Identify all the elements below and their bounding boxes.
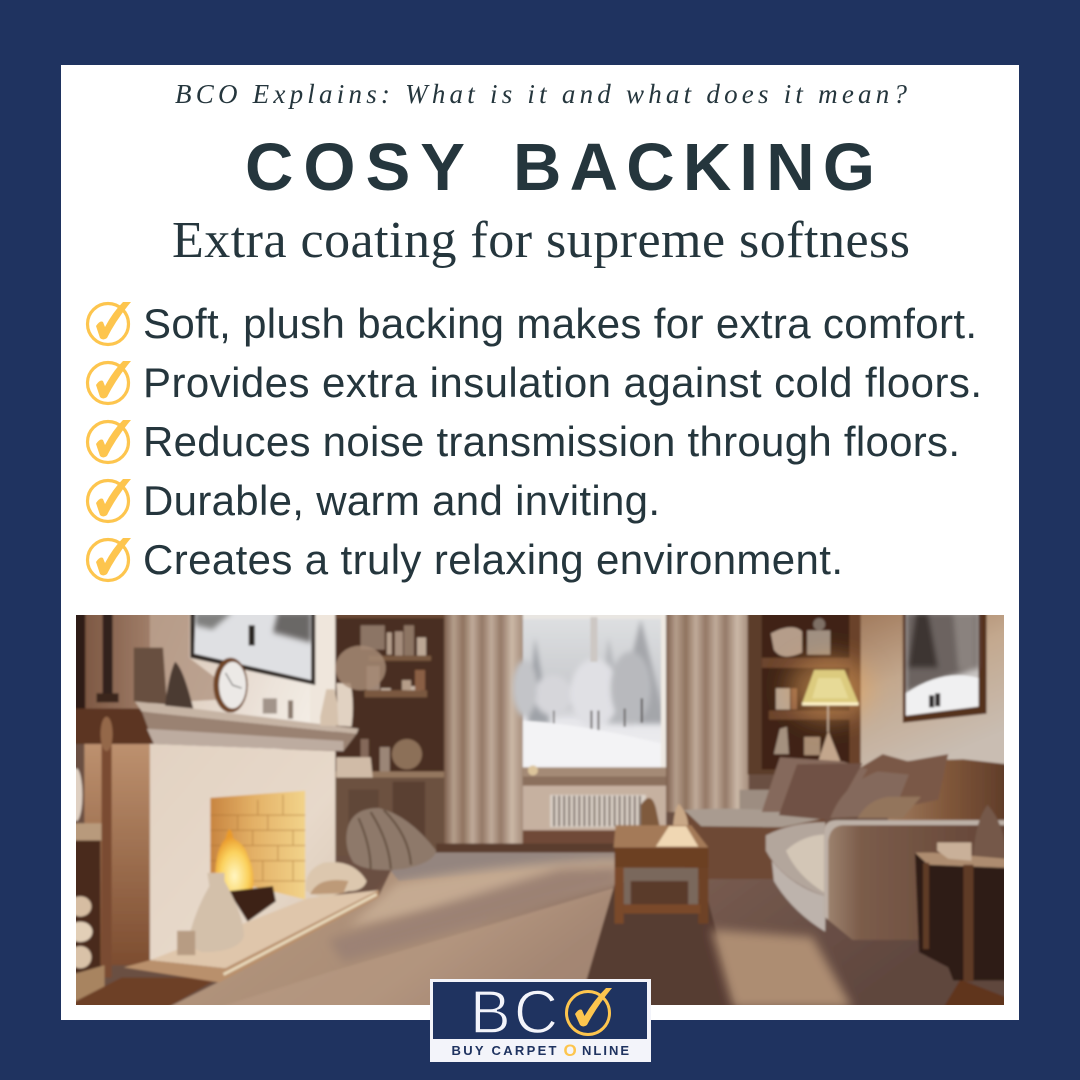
right wall	[861, 612, 1008, 769]
right curtain	[666, 612, 749, 812]
left wall	[72, 612, 336, 749]
benefit 4: Durable, warm and inviting.	[143, 477, 660, 524]
benefit 2: Provides extra insulation against cold floors.	[143, 359, 982, 406]
logo: Buy Carpet Online	[430, 978, 651, 1062]
painting on right wall	[903, 612, 987, 723]
sofa	[684, 754, 1008, 940]
knitted pouffe	[346, 808, 436, 870]
coffee table	[614, 798, 708, 924]
benefit 3: Reduces noise transmission through floors.	[143, 418, 960, 465]
title	[245, 130, 875, 205]
photo: cosy living room with fireplace and snowy window	[68, 612, 1008, 1008]
fireplace	[68, 701, 379, 1008]
floor lamp	[788, 656, 873, 761]
subtitle: Extra coating for supreme softness	[172, 212, 910, 269]
benefit 1: Soft, plush backing makes for extra comfort.	[143, 300, 977, 347]
logo strapline: O	[564, 1041, 577, 1060]
carpet	[167, 853, 1008, 1008]
logo check icon	[566, 988, 612, 1034]
white panel	[61, 65, 1019, 1020]
title: BACKING	[513, 130, 875, 205]
hearth ornaments	[177, 862, 367, 955]
bookshelf right	[748, 612, 861, 774]
logo strapline	[452, 1041, 629, 1060]
logo letters BC: BC	[470, 978, 558, 1046]
left curtain	[444, 612, 523, 843]
mantel ornaments	[134, 612, 386, 727]
logo strapline: BUY CARPET	[452, 1043, 557, 1058]
side table	[915, 805, 1008, 982]
benefit 5: Creates a truly relaxing environment.	[143, 536, 843, 583]
benefits checklist	[88, 300, 982, 583]
eyebrow heading: BCO Explains: What is it and what does it mean?	[175, 79, 907, 109]
window with snowy trees	[513, 612, 666, 769]
bookshelf left	[335, 612, 444, 856]
logo strapline: NLINE	[582, 1043, 629, 1058]
title: COSY	[245, 130, 465, 205]
window sill, radiator and skirting	[436, 765, 668, 853]
